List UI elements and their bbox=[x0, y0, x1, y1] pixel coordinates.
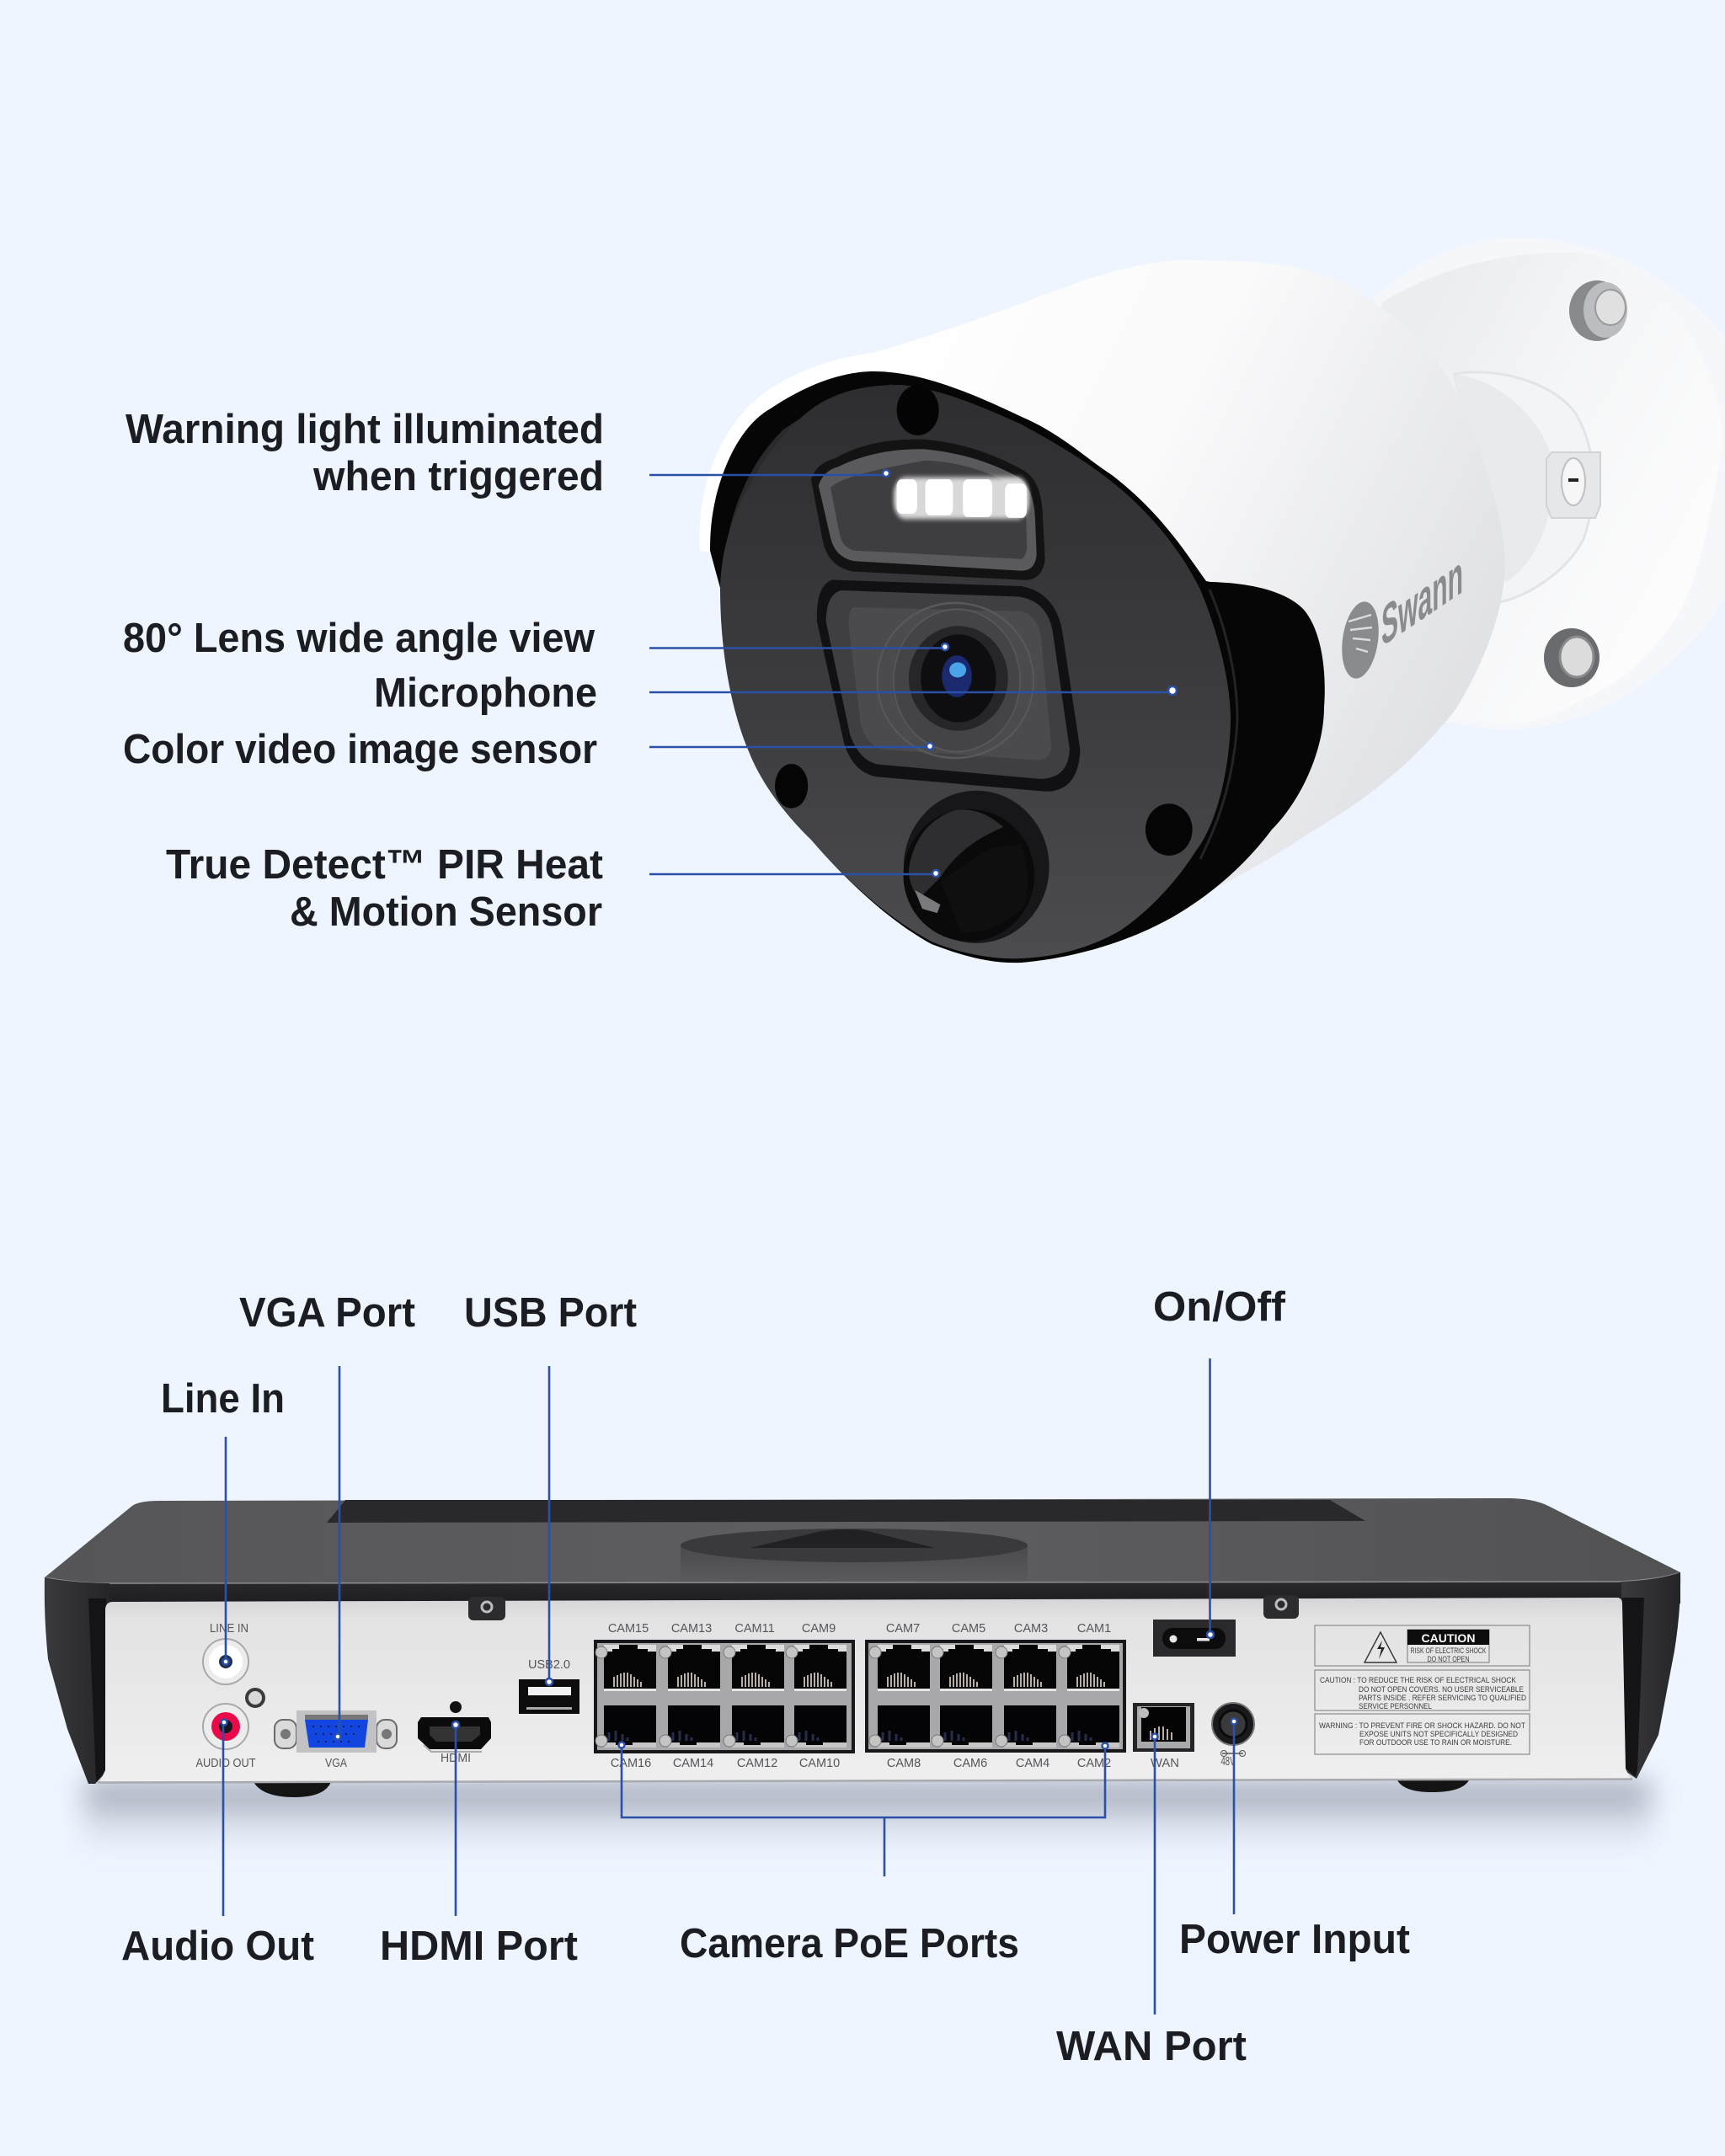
label: audio out: Audio Out bbox=[121, 1924, 314, 1969]
caution labels: WARNING : TO PREVENT FIRE OR SHOCK HAZARD. DO NOT bbox=[1319, 1721, 1525, 1731]
PoE port block: CAM15 to CAM10: CAM14 bbox=[673, 1757, 713, 1770]
power input jack: 48V bbox=[1221, 1755, 1236, 1769]
PoE port block: CAM15 to CAM10: CAM10 bbox=[799, 1757, 840, 1770]
label: camera PoE ports: Camera PoE Ports bbox=[680, 1921, 1019, 1967]
wall mount disc bbox=[1373, 237, 1725, 729]
heading: image sensor: Color video image sensor bbox=[123, 727, 597, 772]
floor shadow bbox=[84, 1782, 1651, 1858]
WAN port: WAN bbox=[1151, 1757, 1179, 1770]
rubber feet bbox=[254, 1779, 1470, 1797]
VGA port bbox=[275, 1710, 397, 1770]
label: on/off: On/Off bbox=[1153, 1284, 1286, 1330]
face details bbox=[775, 385, 1193, 943]
ground screw bbox=[247, 1689, 264, 1706]
caution labels: CAUTION bbox=[1422, 1631, 1476, 1645]
caution labels: DO NOT OPEN bbox=[1427, 1655, 1470, 1664]
power input jack bbox=[1212, 1703, 1254, 1769]
line in jack bbox=[203, 1622, 248, 1684]
top notch bbox=[897, 385, 939, 435]
heading: PIR sensor bbox=[166, 842, 603, 935]
heading: microphone: Microphone bbox=[374, 670, 597, 716]
Swann logo mark bbox=[1338, 600, 1383, 680]
PoE port block: CAM7 to CAM2: CAM3 bbox=[1014, 1622, 1048, 1636]
caution labels: RISK OF ELECTRIC SHOCK bbox=[1410, 1646, 1487, 1656]
PoE port block: CAM15 to CAM10: CAM11 bbox=[734, 1622, 775, 1636]
left side wing bbox=[45, 1577, 109, 1784]
shroud ridge bbox=[1200, 590, 1237, 859]
PoE port block: CAM15 to CAM10: CAM16 bbox=[611, 1757, 651, 1770]
PoE port block: CAM15 to CAM10: CAM9 bbox=[802, 1622, 836, 1636]
PoE port block: CAM7 to CAM2: CAM5 bbox=[952, 1622, 985, 1636]
HDMI port bbox=[418, 1701, 491, 1765]
PoE port block: CAM15 to CAM10: CAM12 bbox=[737, 1757, 777, 1770]
audio out jack bbox=[195, 1704, 256, 1770]
PoE port block: CAM7 to CAM2: CAM4 bbox=[1016, 1757, 1049, 1770]
hood inner shade bbox=[726, 384, 893, 552]
power switch bbox=[1153, 1620, 1236, 1657]
lens module bbox=[817, 580, 1080, 792]
caution labels: DO NOT OPEN COVERS. NO USER SERVICEABLE bbox=[1359, 1685, 1524, 1694]
caution labels: EXPOSE UNITS NOT SPECIFICALLY DESIGNED bbox=[1359, 1730, 1518, 1739]
caution labels: PARTS INSIDE . REFER SERVICING TO QUALIFIED bbox=[1359, 1694, 1526, 1703]
neck bracket bbox=[1546, 452, 1600, 518]
USB port: USB2.0 bbox=[528, 1658, 570, 1672]
panel: bullet camera bbox=[699, 237, 1725, 963]
black hood and shroud bbox=[710, 371, 1325, 963]
warning light module bbox=[811, 440, 1045, 580]
PoE port block: CAM15 to CAM10: CAM15 bbox=[608, 1622, 649, 1636]
caution labels: CAUTION : TO REDUCE THE RISK OF ELECTRICAL SHOCK bbox=[1320, 1676, 1517, 1685]
camera body shell bbox=[699, 260, 1505, 906]
neck bbox=[1455, 372, 1593, 602]
label: line in: Line In bbox=[161, 1376, 285, 1422]
top dark vent bbox=[327, 1500, 1365, 1523]
PoE port block: CAM7 to CAM2: CAM6 bbox=[953, 1757, 987, 1770]
PoE port block: CAM7 to CAM2 bbox=[865, 1622, 1126, 1770]
heading: PIR sensor: & Motion Sensor bbox=[290, 889, 602, 935]
heading: warning light bbox=[126, 407, 604, 499]
silver back panel bbox=[99, 1598, 1631, 1783]
mount screw: lower bbox=[1544, 628, 1599, 687]
label: HDMI port: HDMI Port bbox=[380, 1924, 578, 1969]
heading: lens: 80° Lens wide angle view bbox=[123, 616, 595, 661]
camera face plate bbox=[720, 385, 1231, 958]
caution labels: FOR OUTDOOR USE TO RAIN OR MOISTURE. bbox=[1359, 1738, 1512, 1748]
mounting tabs bbox=[468, 1595, 1299, 1620]
PoE port block: CAM7 to CAM2: CAM8 bbox=[887, 1757, 921, 1770]
HDMI port: HDMI bbox=[441, 1752, 471, 1765]
PIR sensor bbox=[903, 791, 1049, 943]
raised badge bbox=[681, 1529, 1028, 1582]
PoE port block: CAM7 to CAM2: CAM7 bbox=[886, 1622, 920, 1636]
top surface bbox=[45, 1498, 1680, 1585]
label: USB port: USB Port bbox=[464, 1290, 637, 1336]
label: WAN port: WAN Port bbox=[1056, 2024, 1247, 2069]
PoE port block: CAM15 to CAM10 bbox=[594, 1622, 855, 1770]
mounting hole: left bbox=[775, 764, 808, 808]
mount screw: upper bbox=[1569, 280, 1627, 341]
panel: bullet camera: Swann bbox=[1381, 542, 1463, 659]
panel: NVR recorder bbox=[45, 1498, 1680, 1858]
front lip bbox=[45, 1572, 1680, 1604]
NVR leader lines bbox=[221, 1358, 1236, 2015]
heading: warning light: when triggered bbox=[312, 454, 604, 499]
line in jack: LINE IN bbox=[210, 1622, 248, 1636]
camera leader lines bbox=[649, 470, 1177, 877]
caution labels bbox=[1315, 1625, 1530, 1754]
mounting hole: right bbox=[1146, 803, 1193, 856]
heading: PIR sensor: True Detect™ PIR Heat bbox=[166, 842, 603, 888]
right side wing bbox=[1621, 1572, 1680, 1779]
USB port bbox=[519, 1658, 579, 1714]
heading: warning light: Warning light illuminated bbox=[126, 407, 604, 452]
label: VGA port: VGA Port bbox=[239, 1290, 415, 1336]
PoE port block: CAM7 to CAM2: CAM2 bbox=[1077, 1757, 1111, 1770]
caution labels: SERVICE PERSONNEL bbox=[1359, 1702, 1432, 1711]
VGA port: VGA bbox=[325, 1757, 347, 1770]
audio out jack: AUDIO OUT bbox=[195, 1757, 256, 1770]
PoE port block: CAM15 to CAM10: CAM13 bbox=[671, 1622, 712, 1636]
WAN port bbox=[1133, 1703, 1194, 1770]
label: power input: Power Input bbox=[1179, 1917, 1410, 1962]
PoE port block: CAM7 to CAM2: CAM1 bbox=[1077, 1622, 1111, 1636]
